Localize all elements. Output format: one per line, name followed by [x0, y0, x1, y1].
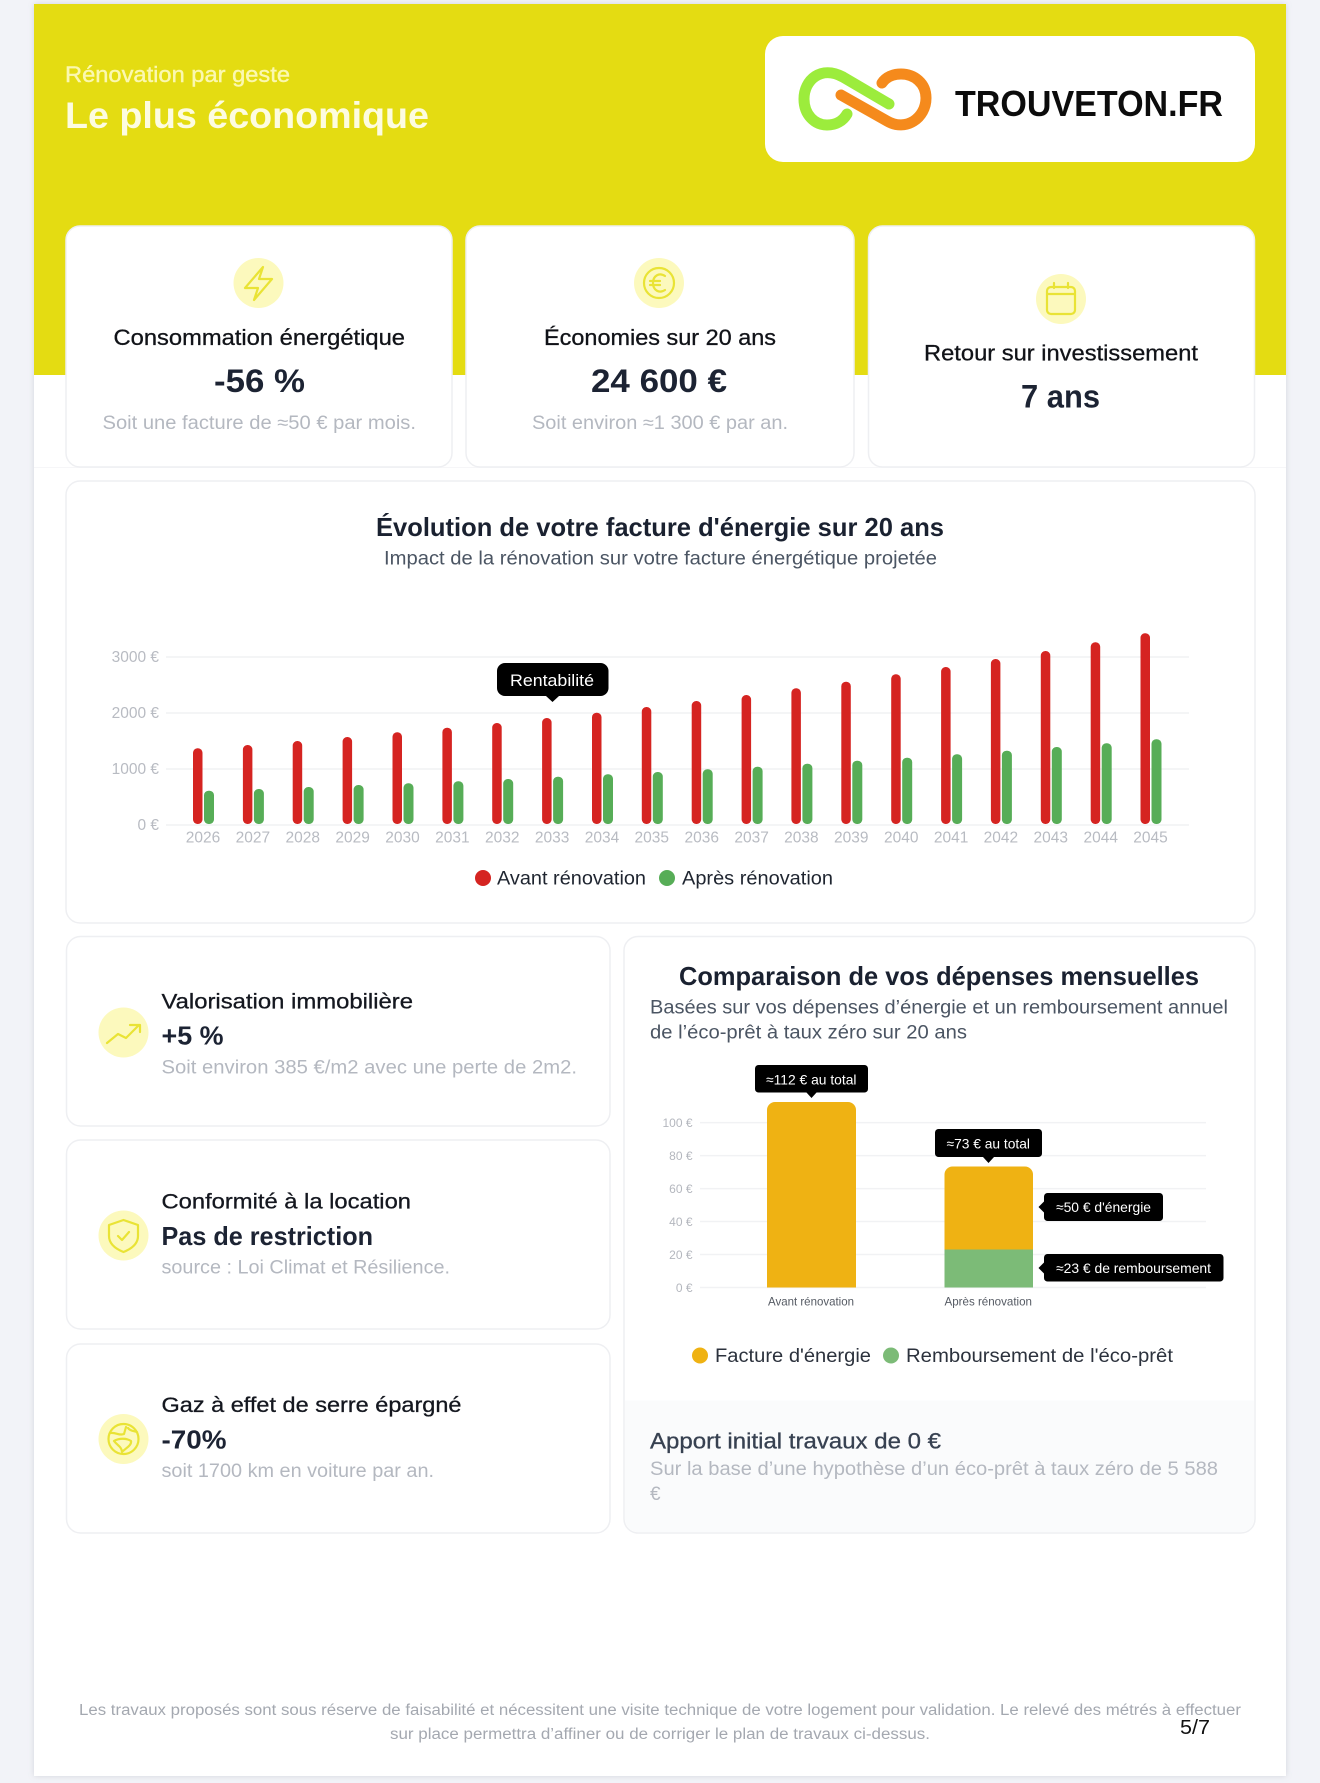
- x axis years: [186, 830, 1168, 846]
- legend: [475, 868, 833, 890]
- icon: lightning: [234, 258, 284, 308]
- faint divider: [34, 466, 1286, 468]
- logo wordmark: TROUVETON.FR: [955, 83, 1223, 124]
- x labels: Après rénovation: [944, 1294, 1032, 1308]
- value: -70%: [162, 1424, 226, 1454]
- y axis and grid: 0 €: [676, 1281, 693, 1295]
- panel: comparaison dépenses mensuelles: [624, 936, 1255, 1533]
- label: Valorisation immobilière: [162, 990, 413, 1014]
- note: [650, 1459, 1218, 1505]
- y axis and grid: [662, 1116, 1206, 1295]
- note: €: [650, 1484, 661, 1505]
- footer disclaimer: Les travaux proposés sont sous réserve de faisabilité et nécessitent une visite technique de votre logement pour validation. Le relevé des métrés à effectuer: [79, 1702, 1241, 1719]
- legend: Remboursement de l'éco-prêt: [906, 1346, 1174, 1367]
- yellow header band: [34, 4, 1286, 375]
- panel: valorisation immobilière: [66, 936, 610, 1126]
- x axis years: 2040: [884, 830, 919, 846]
- chart subtitle: Basées sur vos dépenses d’énergie et un remboursement annuel: [650, 998, 1228, 1018]
- y axis and grid: 2000 €: [112, 705, 159, 722]
- x axis years: 2029: [335, 830, 370, 846]
- x axis years: 2037: [734, 830, 769, 846]
- y axis and grid: 0 €: [137, 817, 159, 834]
- header titles: [65, 62, 429, 136]
- x axis years: 2043: [1034, 830, 1068, 846]
- title: Le plus économique: Le plus économique: [65, 95, 429, 136]
- icon: trending up: [98, 1008, 148, 1058]
- green bars: après rénovation: [204, 739, 1162, 824]
- x axis years: 2039: [834, 830, 869, 846]
- eyebrow: Rénovation par geste: Rénovation par geste: [65, 62, 290, 87]
- apport initial section: [625, 1400, 1254, 1532]
- x axis years: 2031: [435, 830, 470, 846]
- chart subtitle: de l’éco-prêt à taux zéro sur 20 ans: [650, 1022, 967, 1044]
- chart subtitle: Impact de la rénovation sur votre facture énergétique projetée: [384, 548, 937, 570]
- x axis years: 2032: [485, 830, 519, 846]
- y axis and grid: [112, 649, 1189, 834]
- legend: Après rénovation: [682, 868, 833, 890]
- callout: 50 énergie: ≈50 € d'énergie: [1056, 1199, 1151, 1215]
- panel: retour sur investissement: [868, 226, 1254, 467]
- chart title: Évolution de votre facture d'énergie sur 20 ans: [376, 512, 944, 542]
- label: Gaz à effet de serre épargné: [162, 1393, 462, 1417]
- description: soit 1700 km en voiture par an.: [162, 1461, 434, 1482]
- callout: Rentabilité: Rentabilité: [510, 671, 594, 690]
- x axis years: 2038: [784, 830, 819, 846]
- callout: 73 total: [935, 1129, 1042, 1163]
- y axis and grid: 3000 €: [112, 649, 159, 666]
- bar: avant rénovation: [767, 1102, 856, 1288]
- y axis and grid: 100 €: [662, 1116, 693, 1130]
- y axis and grid: 40 €: [669, 1215, 693, 1229]
- panel: consommation énergétique: [66, 226, 452, 467]
- x axis years: 2045: [1133, 830, 1168, 846]
- label: Consommation énergétique: [114, 325, 405, 350]
- value: +5 %: [162, 1020, 224, 1050]
- logo card: [765, 36, 1255, 162]
- description: source : Loi Climat et Résilience.: [162, 1258, 450, 1278]
- x axis years: 2034: [585, 830, 620, 846]
- footer disclaimer: [79, 1702, 1241, 1743]
- page number: 5/7: [1180, 1717, 1210, 1739]
- x axis years: 2035: [635, 830, 669, 846]
- callout: 112 total: ≈112 € au total: [766, 1072, 856, 1088]
- panel: conformité à la location: [66, 1140, 610, 1329]
- value: Pas de restriction: [162, 1221, 373, 1251]
- description: Soit une facture de ≈50 € par mois.: [102, 413, 416, 434]
- callout: 73 total: ≈73 € au total: [946, 1136, 1030, 1152]
- bar: après rénovation: [944, 1166, 1033, 1288]
- legend: Avant rénovation: [497, 868, 646, 890]
- description: Soit environ ≈1 300 € par an.: [532, 413, 788, 434]
- description: Soit environ 385 €/m2 avec une perte de 2m2.: [162, 1058, 577, 1078]
- value: -56 %: [214, 363, 305, 399]
- chart subtitle: [650, 998, 1228, 1044]
- panel: économies: [466, 226, 854, 467]
- icon: euro coin: [634, 258, 684, 308]
- legend: Facture d'énergie: [715, 1346, 871, 1367]
- icon: calendar: [1036, 274, 1086, 324]
- x labels: [768, 1294, 1032, 1308]
- label: Économies sur 20 ans: [544, 325, 776, 350]
- heading: Apport initial travaux de 0 €: [650, 1428, 941, 1454]
- x axis years: 2026: [186, 830, 220, 846]
- x labels: Avant rénovation: [768, 1294, 854, 1308]
- icon: shield check: [98, 1210, 148, 1260]
- callout: Rentabilité: [497, 663, 608, 702]
- red bars: avant rénovation: [193, 633, 1150, 824]
- callout: 50 énergie: [1038, 1193, 1163, 1221]
- label: Conformité à la location: [162, 1190, 411, 1214]
- logo mark: infinity link: [804, 73, 926, 125]
- chart title: Comparaison de vos dépenses mensuelles: [679, 961, 1199, 991]
- note: Sur la base d’une hypothèse d’un éco-prêt à taux zéro de 5 588: [650, 1459, 1218, 1480]
- footer disclaimer: sur place permettra d’affiner ou de corriger le plan de travaux ci-dessus.: [390, 1726, 930, 1743]
- value: 7 ans: [1021, 378, 1100, 414]
- x axis years: 2042: [984, 830, 1018, 846]
- value: 24 600 €: [591, 363, 727, 399]
- x axis years: 2028: [285, 830, 320, 846]
- y axis and grid: 20 €: [669, 1248, 693, 1262]
- x axis years: 2030: [385, 830, 420, 846]
- x axis years: 2033: [535, 830, 569, 846]
- x axis years: 2027: [236, 830, 270, 846]
- y axis and grid: 60 €: [669, 1182, 693, 1196]
- legend: [692, 1346, 1174, 1367]
- panel: gaz à effet de serre: [66, 1344, 610, 1533]
- y axis and grid: 80 €: [669, 1149, 693, 1163]
- x axis years: 2041: [934, 830, 968, 846]
- callout: 23 remboursement: [1038, 1254, 1224, 1282]
- label: Retour sur investissement: [924, 340, 1198, 366]
- y axis and grid: 1000 €: [112, 761, 159, 778]
- callout: 23 remboursement: ≈23 € de remboursement: [1056, 1260, 1211, 1276]
- x axis years: 2044: [1083, 830, 1118, 846]
- panel: évolution facture bar chart: [66, 481, 1255, 923]
- callout: 112 total: [755, 1065, 868, 1098]
- icon: globe: [98, 1414, 148, 1464]
- x axis years: 2036: [684, 830, 719, 846]
